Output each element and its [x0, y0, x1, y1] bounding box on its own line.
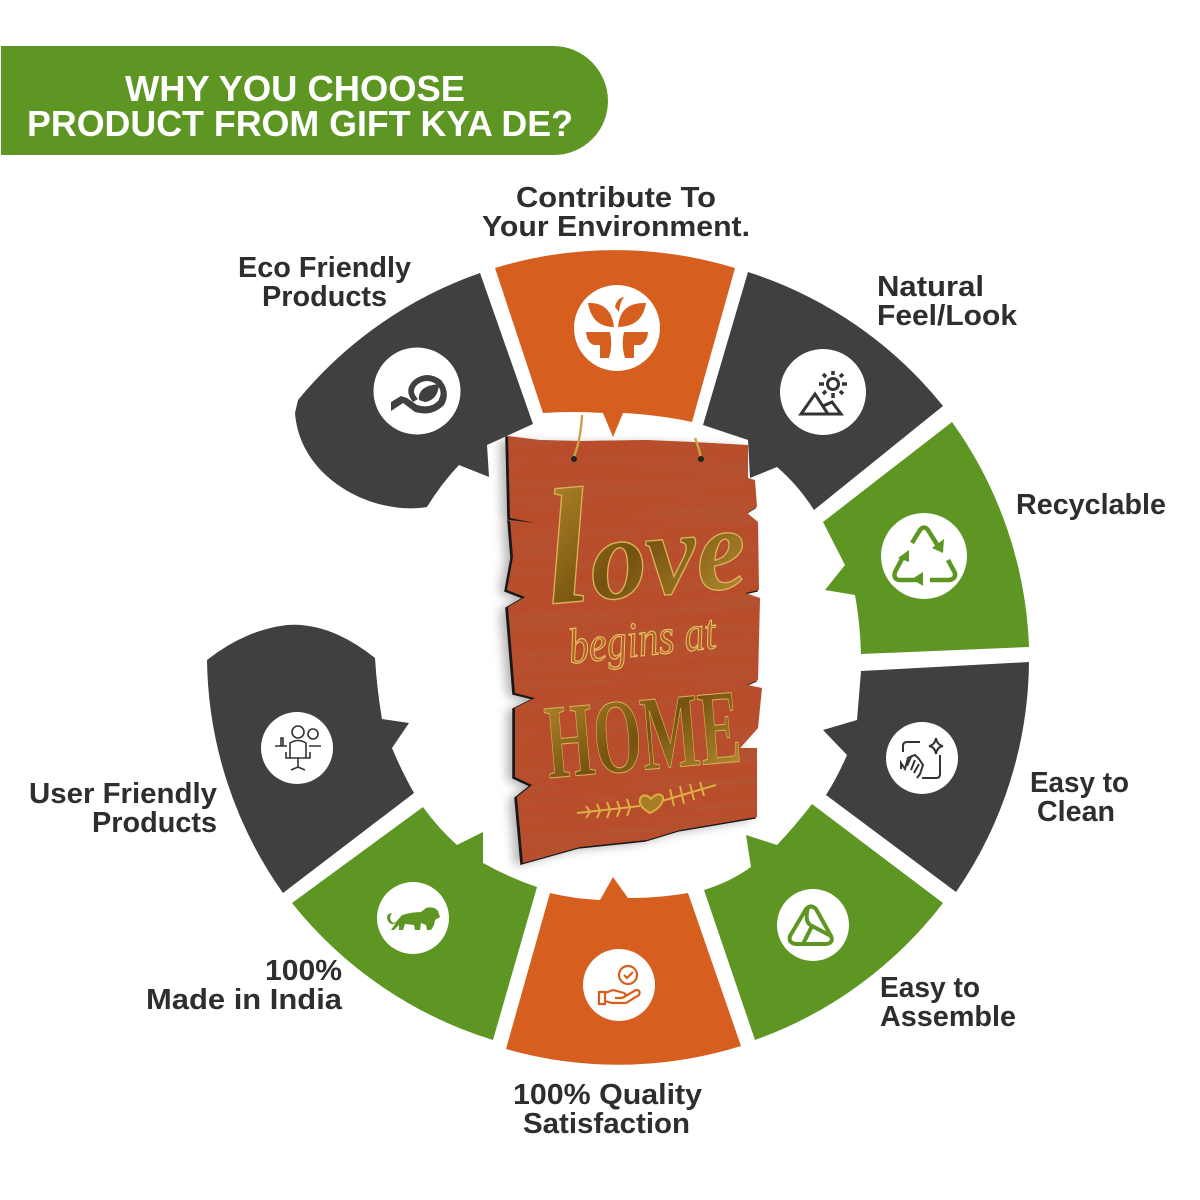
label: Eco Friendly Products — [238, 252, 411, 313]
label: Easy to Clean — [1030, 767, 1129, 828]
label: 100% Made in India: Made in India — [146, 984, 343, 1016]
segment: Easy to Assemble — [704, 804, 943, 1040]
icon: rounded triangle — [790, 906, 832, 944]
label: Easy to Clean: Easy to — [1030, 767, 1129, 799]
segment: Recyclable — [823, 422, 1029, 654]
icon: recycle arrows — [894, 528, 955, 586]
label: Easy to Assemble: Assemble — [880, 1001, 1016, 1033]
segment: Contribute To Your Environment — [495, 250, 735, 437]
label: User Friendly Products: Products — [92, 807, 217, 839]
ornament: heart and branches — [577, 782, 716, 818]
label: User Friendly Products: User Friendly — [29, 778, 217, 810]
label: Eco Friendly Products: Products — [262, 281, 387, 313]
icon: sun and mountains — [801, 371, 847, 414]
heading banner — [1, 46, 608, 155]
segment: Eco Friendly Products — [295, 273, 533, 508]
label: 100% Made in India — [146, 955, 343, 1016]
label: Contribute To Your Environment — [482, 182, 750, 243]
label: Recyclable: Recyclable — [1016, 489, 1166, 521]
label: Contribute To Your Environment: Your Environment. — [482, 211, 750, 243]
product sign: love begins at home — [494, 415, 762, 870]
icon: hand with quality badge — [599, 966, 640, 1004]
segment: Easy to Clean — [823, 662, 1029, 892]
segment: User Friendly Products — [207, 625, 414, 893]
label: 100% Quality Satisfaction: Satisfaction — [523, 1108, 690, 1140]
icon: lion — [387, 907, 440, 930]
label: Easy to Assemble: Easy to — [880, 972, 980, 1004]
icon: plant in hands — [586, 297, 648, 358]
label: Easy to Assemble — [880, 972, 1016, 1033]
label: Natural Feel/Look: Natural — [877, 271, 984, 303]
heading banner: WHY YOU CHOOSE — [125, 68, 465, 109]
label: Natural Feel/Look — [877, 271, 1018, 332]
label: Easy to Clean: Clean — [1037, 796, 1115, 828]
label: 100% Quality Satisfaction: 100% Quality — [513, 1079, 702, 1111]
hanging rope — [571, 415, 704, 462]
word: love: love — [537, 440, 752, 640]
heading banner: PRODUCT FROM GIFT KYA DE? — [27, 103, 573, 144]
label: 100% Quality Satisfaction — [513, 1079, 702, 1140]
icon: hand holding leaf — [391, 375, 447, 413]
label: Eco Friendly Products: Eco Friendly — [238, 252, 411, 284]
segment: 100% Quality Satisfaction — [506, 877, 741, 1065]
label: Natural Feel/Look: Feel/Look — [877, 300, 1018, 332]
label: Contribute To Your Environment: Contribute To — [516, 182, 716, 214]
word: HOME: HOME — [541, 667, 745, 801]
segment: 100% Made in India — [292, 807, 537, 1040]
label: User Friendly Products — [29, 778, 217, 839]
segment: Natural Feel/Look — [703, 272, 943, 510]
icon: person at desk — [275, 726, 321, 770]
icon: hand wiping surface — [901, 738, 943, 778]
label: 100% Made in India: 100% — [265, 955, 342, 987]
words: begins at: begins at — [565, 603, 719, 674]
